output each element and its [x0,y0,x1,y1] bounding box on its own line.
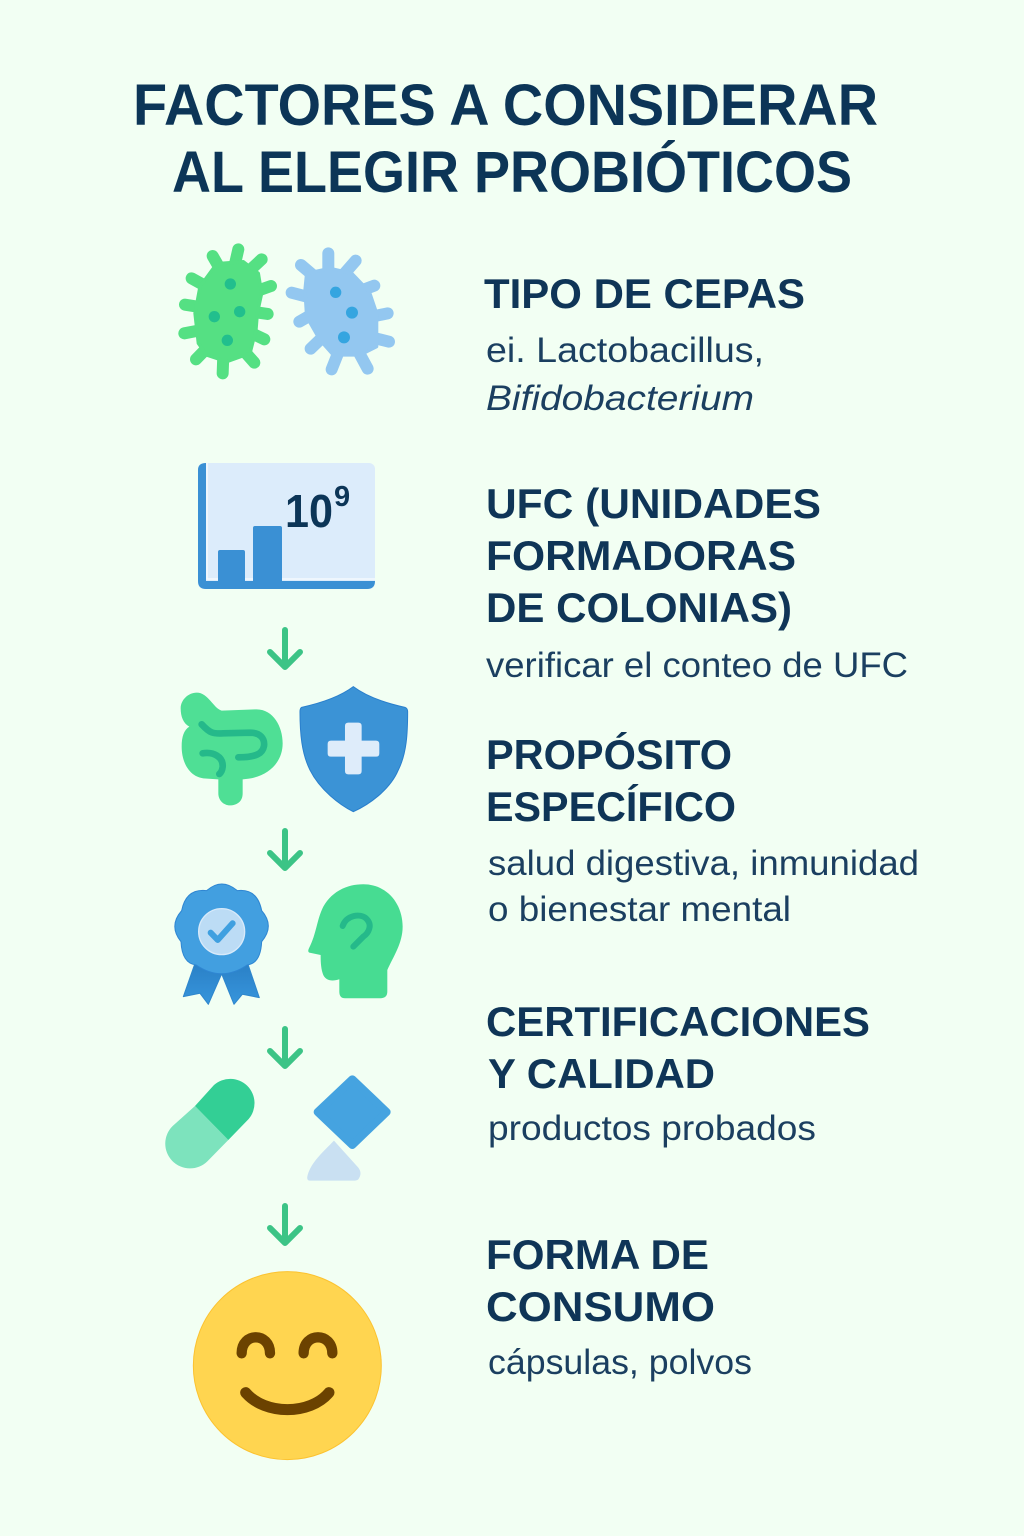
heading and text: ufc [486,480,908,685]
heading and text: ufc: UFC (UNIDADES [486,480,821,527]
heading and text: propósito específico: ESPECÍFICO [486,783,736,830]
heading and text: certificaciones: Y CALIDAD [488,1050,715,1097]
icon: intestine [181,693,283,805]
icon: capsule [165,1079,255,1168]
icon: bar chart with 10^9 [198,463,375,589]
icon: green bacterium [184,249,271,373]
title [133,73,878,205]
heading and text: tipo de cepas: ei. Lactobacillus, [486,331,764,370]
title: AL ELEGIR PROBIÓTICOS [172,140,852,205]
heading and text: propósito específico [486,730,919,929]
heading and text: tipo de cepas [484,270,805,418]
heading and text: certificaciones: CERTIFICACIONES [486,998,870,1045]
heading and text: forma de consumo [486,1231,752,1382]
heading and text: tipo de cepas: Bifidobacterium [486,379,754,418]
icon: blue bacterium [292,253,389,369]
icon: bar chart with 10^9: 10 [285,485,333,537]
title: FACTORES A CONSIDERAR [133,73,878,138]
heading and text: propósito específico: salud digestiva, inmunidad [488,844,919,883]
icon: shield with cross [300,687,408,812]
arrow 4 [270,1206,300,1243]
icon: certification badge [175,884,268,1004]
icon: head with question mark [308,884,403,998]
icon: bar chart with 10^9: 9 [334,481,350,513]
heading and text: forma de consumo: CONSUMO [486,1283,715,1330]
icon: powder [307,1079,387,1181]
heading and text: ufc: DE COLONIAS) [486,584,792,631]
heading and text: ufc: FORMADORAS [486,532,796,579]
arrow 3 [270,1029,300,1066]
heading and text: certificaciones: productos probados [488,1109,816,1148]
arrow 2 [270,831,300,868]
heading and text: propósito específico: o bienestar mental [488,890,791,929]
icon: smiling face [193,1272,381,1460]
heading and text: ufc: verificar el conteo de UFC [486,646,908,685]
arrow 1 [270,630,300,667]
heading and text: forma de consumo: FORMA DE [486,1231,709,1278]
heading and text: tipo de cepas: TIPO DE CEPAS [484,270,805,317]
heading and text: certificaciones [486,998,870,1148]
heading and text: propósito específico: PROPÓSITO [486,730,732,778]
heading and text: forma de consumo: cápsulas, polvos [488,1343,752,1382]
